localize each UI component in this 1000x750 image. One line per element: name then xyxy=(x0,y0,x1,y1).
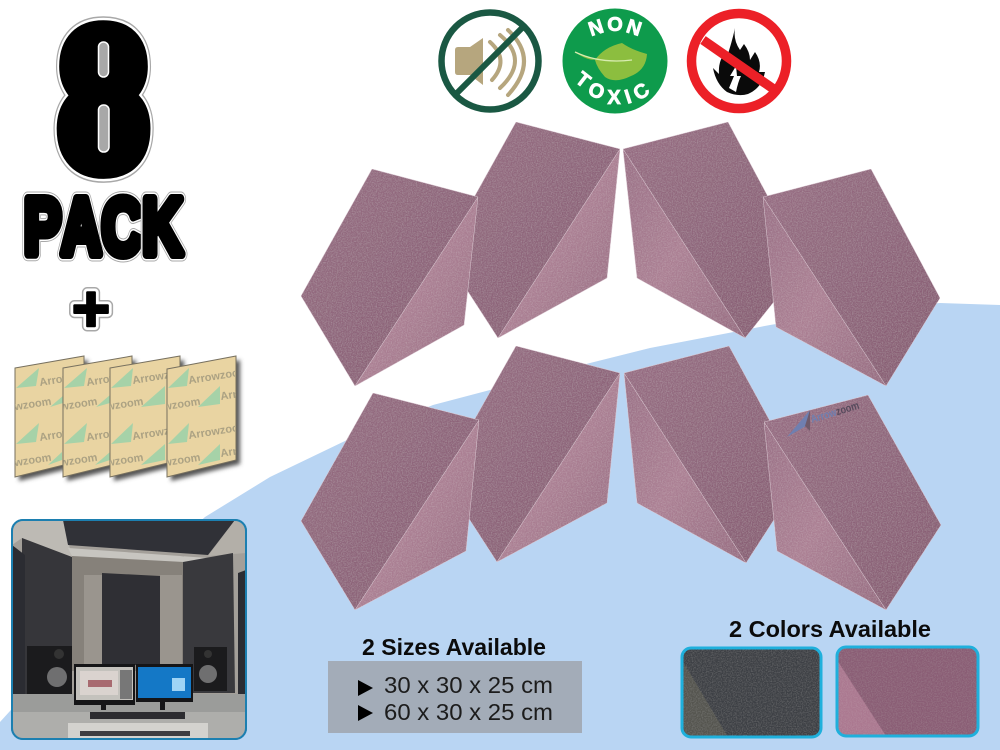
word PACK: K xyxy=(142,181,183,271)
word PACK: P xyxy=(24,181,61,271)
sheet 2: Arrowzoom xyxy=(86,368,147,389)
word PACK: A xyxy=(61,181,101,271)
word PACK: C xyxy=(102,181,142,271)
sheet 1 xyxy=(14,355,92,484)
sheet 4: Arrowzoom xyxy=(188,421,249,442)
icon: non toxic: I xyxy=(622,86,634,109)
icon: non toxic: O xyxy=(607,14,623,36)
icons row xyxy=(442,8,786,114)
sheet 4 xyxy=(166,355,244,484)
sheet 3 xyxy=(110,355,188,484)
panel 8 xyxy=(764,395,941,610)
word PACK: C xyxy=(102,181,142,271)
panel 4 xyxy=(763,169,940,386)
icon: non toxic xyxy=(562,8,668,114)
colours block xyxy=(682,616,978,737)
sheet 3: Arrowzoom xyxy=(132,366,193,387)
watermark logo xyxy=(787,400,861,437)
panel 6 xyxy=(442,346,620,562)
icon: no sound xyxy=(442,12,538,110)
sheet 2 xyxy=(62,355,140,484)
panel 7 xyxy=(624,346,801,563)
sheet 2: Arrowzoom xyxy=(86,423,147,444)
sizes list xyxy=(328,661,582,733)
word PACK xyxy=(24,181,183,271)
icon: non toxic: T xyxy=(571,68,594,93)
sheet 3: Arrowzoom xyxy=(83,396,144,417)
sheet 1: Arrowzoom xyxy=(39,368,100,389)
icon: non toxic: C xyxy=(629,79,654,105)
sheet 4: Arrowzoom xyxy=(220,439,281,460)
title: 8 pack xyxy=(24,0,183,345)
sheet 4: Arrowzoom xyxy=(140,396,201,417)
sheet 2: Arrowzoom xyxy=(37,452,98,473)
word PACK: A xyxy=(61,181,101,271)
icon: non toxic: X xyxy=(607,87,621,109)
studio photo xyxy=(11,519,247,740)
blue background curve xyxy=(0,303,1000,750)
speakers xyxy=(27,646,227,694)
sheet 4: Arrowzoom xyxy=(140,452,201,473)
sheet 4: Arrowzoom xyxy=(220,382,281,403)
desk and keyboard xyxy=(12,694,246,739)
adhesive sheets xyxy=(14,355,244,484)
sizes block xyxy=(328,634,582,733)
sheet 4: Arrowzoom xyxy=(188,366,249,387)
sheet 3: Arrowzoom xyxy=(83,452,144,473)
sizes list: 30 x 30 x 25 cm xyxy=(384,672,553,698)
word PACK: K xyxy=(142,181,183,271)
icon: non toxic: O xyxy=(585,78,608,105)
foam wedge panels xyxy=(301,122,941,610)
panel 5 xyxy=(301,393,479,610)
swatch: burgundy xyxy=(837,647,978,736)
watermark logo: Arrowzoom xyxy=(809,400,861,426)
word PACK: P xyxy=(24,181,61,271)
plus sign: + xyxy=(72,271,110,345)
monitors xyxy=(74,664,193,710)
panel 2 xyxy=(443,122,620,338)
colours heading: 2 Colors Available xyxy=(729,616,931,642)
panel 1 xyxy=(301,169,478,386)
word PACK: A xyxy=(61,181,101,271)
word PACK: C xyxy=(102,181,142,271)
word PACK: P xyxy=(24,181,61,271)
panel 3 xyxy=(623,122,804,338)
plus sign: + xyxy=(72,271,110,345)
sheet 2: Arrowzoom xyxy=(37,396,98,417)
word PACK: K xyxy=(142,181,183,271)
sizes list: 60 x 30 x 25 cm xyxy=(384,699,553,725)
plus sign: + xyxy=(72,271,110,345)
icon: no fire xyxy=(692,14,786,108)
sheet 3: Arrowzoom xyxy=(132,422,193,443)
sizes heading: 2 Sizes Available xyxy=(362,634,546,660)
icon: non toxic: N xyxy=(624,16,644,41)
swatch: charcoal xyxy=(682,648,821,737)
icon: non toxic: N xyxy=(586,16,606,41)
sheet 1: Arrowzoom xyxy=(39,423,100,444)
